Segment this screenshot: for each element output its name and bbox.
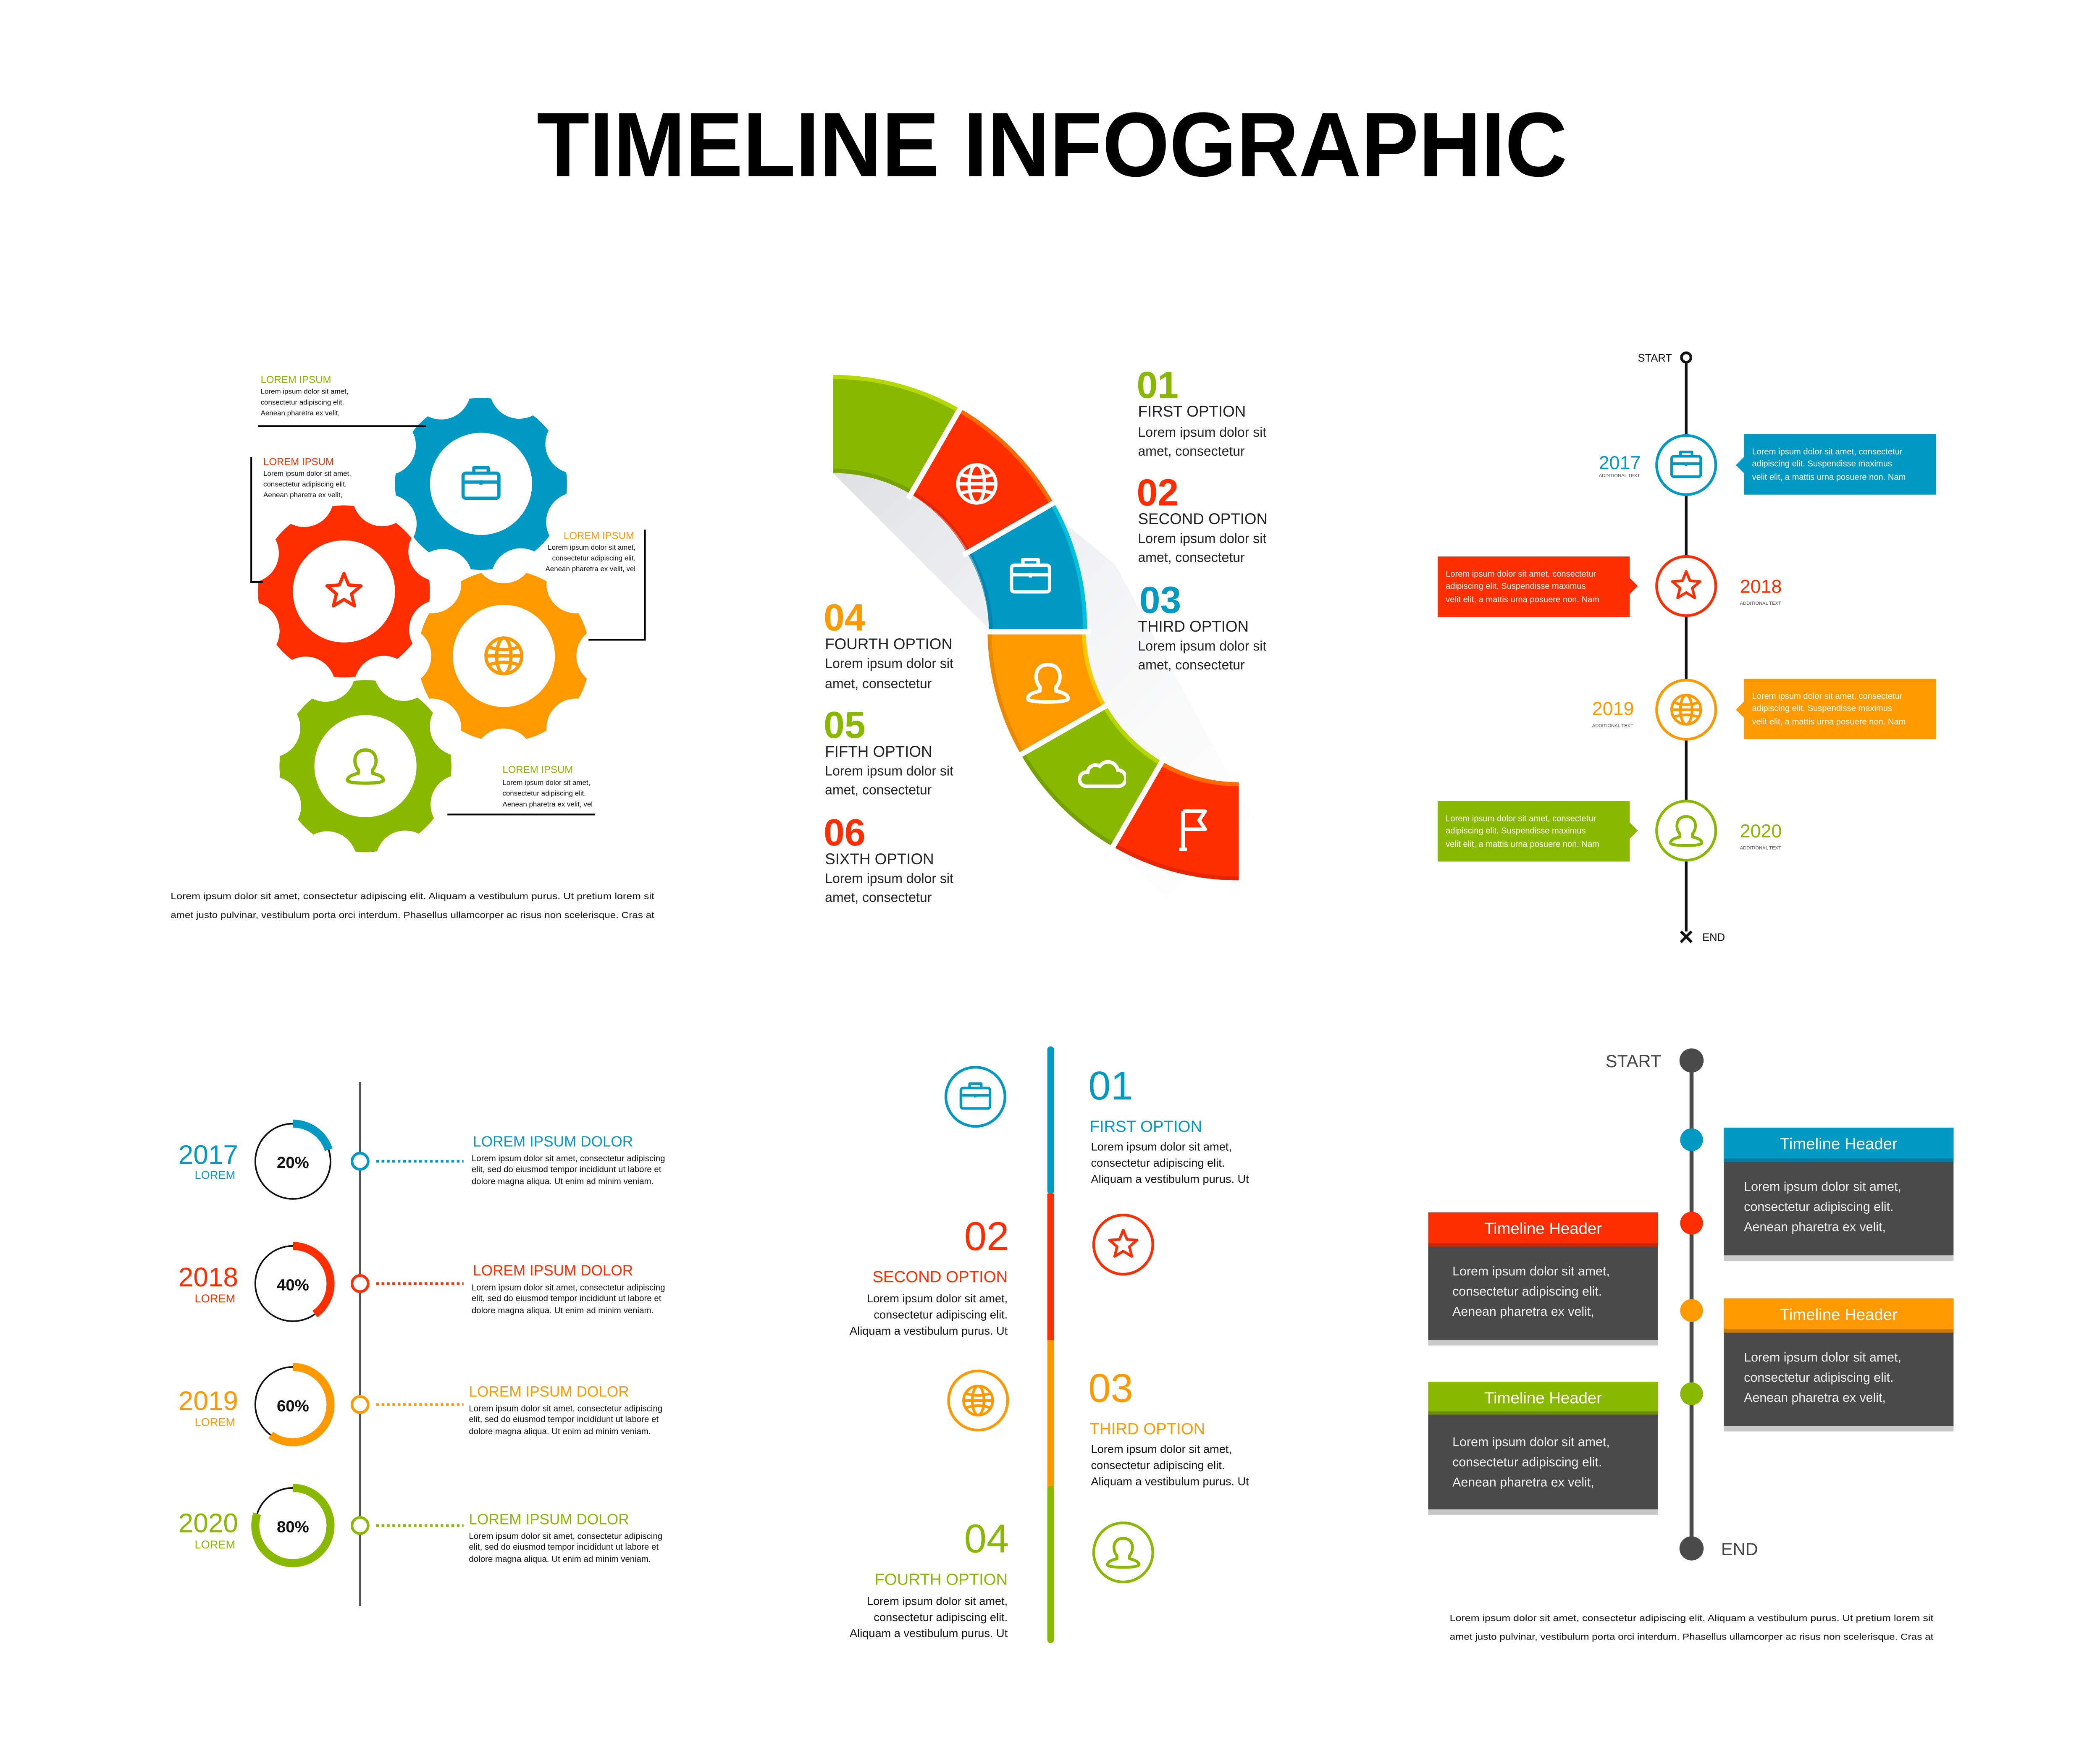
text: red label: Lorem ipsum dolor sit amet, — [263, 470, 351, 478]
panel: progress timeline bottom left — [178, 1082, 665, 1606]
option 04: FOURTH OPTION — [825, 635, 953, 653]
option 02: 02 — [964, 1214, 1009, 1259]
icon: cloud — [1079, 762, 1126, 786]
icon: flag — [1179, 811, 1205, 850]
node 2017: Lorem ipsum dolor sit amet, consectetur — [1752, 447, 1903, 457]
option 02: consectetur adipiscing elit. — [874, 1308, 1008, 1321]
icon: person — [347, 750, 383, 783]
option 03 — [1088, 1366, 1249, 1488]
row 2020: LOREM IPSUM DOLOR — [469, 1511, 629, 1527]
option 03: THIRD OPTION — [1089, 1420, 1205, 1438]
option 05 — [824, 704, 953, 797]
option 04: Aliquam a vestibulum purus. Ut — [850, 1627, 1008, 1640]
option 01: FIRST OPTION — [1089, 1118, 1202, 1136]
option 01 — [1088, 1063, 1249, 1185]
title: TIMELINE INFOGRAPHIC — [537, 94, 1567, 196]
icon: briefcase — [1011, 559, 1050, 592]
option 05: FIFTH OPTION — [825, 743, 932, 760]
option 04 — [824, 596, 953, 691]
node 2019: ADDITIONAL TEXT — [1592, 723, 1633, 728]
row 2018: LOREM — [195, 1292, 235, 1305]
option 04: amet, consectetur — [825, 676, 932, 691]
card: green: consectetur adipiscing elit. — [1452, 1455, 1602, 1469]
option 05: Lorem ipsum dolor sit — [825, 763, 953, 779]
option 01: consectetur adipiscing elit. — [1091, 1156, 1225, 1169]
card: orange: consectetur adipiscing elit. — [1744, 1370, 1893, 1385]
row 2017: elit, sed do eiusmod tempor incididunt ut labore et — [472, 1165, 662, 1174]
option 03: consectetur adipiscing elit. — [1091, 1459, 1225, 1472]
panel: curved options — [824, 364, 1344, 947]
icon circle: globe — [948, 1371, 1008, 1430]
row 2020: Lorem ipsum dolor sit amet, consectetur adipiscing — [469, 1532, 662, 1541]
gear: green — [279, 680, 452, 853]
segment: red 2 — [911, 409, 1053, 551]
card: orange: Lorem ipsum dolor sit amet, — [1744, 1350, 1901, 1364]
text: red label: LOREM IPSUM — [263, 456, 334, 467]
panel: card timeline bottom right — [1428, 1048, 1953, 1642]
option 01: 01 — [1137, 364, 1179, 406]
option 03: THIRD OPTION — [1138, 618, 1249, 635]
option 04: 04 — [824, 596, 866, 638]
text: red label: Aenean pharetra ex velit, — [263, 491, 342, 499]
option 01 — [1137, 364, 1266, 459]
row 2017: LOREM IPSUM DOLOR — [473, 1133, 633, 1150]
row 2018: 2018 — [178, 1262, 238, 1292]
row 2020: 2020 — [178, 1508, 238, 1538]
node 2017: ADDITIONAL TEXT — [1599, 473, 1640, 478]
option 02: SECOND OPTION — [1138, 510, 1268, 527]
text: orange label: Lorem ipsum dolor sit amet, — [548, 543, 635, 551]
node 2018: 2018 — [1740, 576, 1782, 597]
panel: colored line timeline bottom middle — [850, 1050, 1249, 1640]
text: paragraph — [1450, 1614, 1933, 1642]
row 2019: LOREM — [195, 1416, 235, 1429]
node 2020: ADDITIONAL TEXT — [1740, 846, 1781, 851]
card: red — [1428, 1212, 1658, 1346]
row 2018: Lorem ipsum dolor sit amet, consectetur adipiscing — [472, 1283, 665, 1292]
node 2018: Lorem ipsum dolor sit amet, consectetur — [1446, 569, 1596, 579]
row 2019: 2019 — [178, 1385, 238, 1416]
end marker: END — [1702, 931, 1725, 943]
option 01: FIRST OPTION — [1138, 403, 1246, 420]
card: blue: Timeline Header — [1780, 1135, 1898, 1153]
card: red: consectetur adipiscing elit. — [1452, 1284, 1602, 1299]
node 2019: velit elit, a mattis urna posuere non. Nam — [1752, 717, 1906, 727]
option 04: consectetur adipiscing elit. — [874, 1611, 1008, 1624]
icon circle: person — [1094, 1523, 1153, 1582]
option 03: amet, consectetur — [1138, 657, 1245, 672]
text: red label — [263, 456, 351, 499]
icon circle: briefcase — [946, 1067, 1005, 1126]
text: green label bottom: Aenean pharetra ex velit, vel — [502, 800, 593, 808]
row 2019 — [178, 1367, 662, 1442]
row 2020: LOREM — [195, 1538, 235, 1551]
node 2019: 2019 — [1592, 698, 1634, 719]
text: orange label: consectetur adipiscing elit. — [552, 554, 635, 562]
card: blue: Aenean pharetra ex velit, — [1744, 1220, 1886, 1234]
text: paragraph: amet justo pulvinar, vestibulum porta orci interdum. Phasellus ullamcorper ac risus non scelerisque. Cras at — [171, 910, 654, 920]
text: green label bottom — [502, 764, 593, 808]
row 2019: 60% — [277, 1397, 309, 1415]
row 2019: elit, sed do eiusmod tempor incididunt ut labore et — [469, 1414, 659, 1424]
option 03: Lorem ipsum dolor sit — [1138, 638, 1266, 653]
panel: vertical timeline top right — [1438, 352, 1936, 943]
text: green label top: Aenean pharetra ex velit, — [261, 409, 340, 417]
node 2020: 2020 — [1740, 821, 1782, 842]
option 02: 02 — [1137, 471, 1179, 513]
text: red label: consectetur adipiscing elit. — [263, 480, 347, 488]
start: START — [1606, 1051, 1661, 1071]
option 06 — [824, 811, 953, 905]
node 2020: Lorem ipsum dolor sit amet, consectetur — [1446, 814, 1596, 823]
option 02: Lorem ipsum dolor sit amet, — [867, 1292, 1008, 1305]
node 2019 — [1592, 679, 1936, 739]
option 02: Aliquam a vestibulum purus. Ut — [850, 1324, 1008, 1337]
option 06: SIXTH OPTION — [825, 850, 934, 868]
row 2018: dolore magna aliqua. Ut enim ad minim veniam. — [472, 1306, 654, 1315]
card: red: Timeline Header — [1484, 1220, 1602, 1238]
row 2018 — [178, 1246, 665, 1321]
row 2018: elit, sed do eiusmod tempor incididunt ut labore et — [472, 1293, 662, 1303]
node 2019: Lorem ipsum dolor sit amet, consectetur — [1752, 692, 1903, 701]
text: green label top: LOREM IPSUM — [261, 374, 331, 386]
option 06: amet, consectetur — [825, 890, 932, 905]
option 01: Lorem ipsum dolor sit amet, — [1091, 1140, 1232, 1153]
segment: green 1 — [833, 375, 960, 494]
end marker — [1681, 931, 1725, 943]
option 03: 03 — [1088, 1366, 1133, 1411]
option 02: SECOND OPTION — [872, 1268, 1008, 1286]
icon: star — [327, 574, 361, 606]
row 2020: elit, sed do eiusmod tempor incididunt ut labore et — [469, 1542, 659, 1552]
segment: green 5 — [1021, 706, 1162, 847]
icon: globe — [958, 465, 996, 503]
option 06: Lorem ipsum dolor sit — [825, 871, 953, 886]
row 2020: dolore magna aliqua. Ut enim ad minim veniam. — [469, 1554, 651, 1564]
end — [1680, 1536, 1758, 1561]
node 2019: adipiscing elit. Suspendisse maximus — [1752, 704, 1892, 713]
card: blue: consectetur adipiscing elit. — [1744, 1200, 1893, 1214]
option 04: 04 — [964, 1516, 1009, 1561]
option 05: 05 — [824, 704, 866, 746]
text: orange label: Aenean pharetra ex velit, vel — [545, 565, 635, 573]
node 2020 — [1438, 801, 1782, 861]
start — [1606, 1048, 1704, 1073]
text: green label bottom: consectetur adipiscing elit. — [502, 790, 586, 798]
card: blue: Lorem ipsum dolor sit amet, — [1744, 1180, 1901, 1194]
text: paragraph: Lorem ipsum dolor sit amet, consectetur adipiscing elit. Aliquam a vestibulum purus. Ut pretium lorem sit — [1450, 1614, 1933, 1623]
text: paragraph: amet justo pulvinar, vestibulum porta orci interdum. Phasellus ullamcorper ac risus non scelerisque. Cras at — [1450, 1632, 1933, 1642]
card: green: Timeline Header — [1484, 1389, 1602, 1407]
node 2017: 2017 — [1599, 452, 1641, 473]
text: green label top: consectetur adipiscing elit. — [261, 398, 344, 406]
option 04 — [850, 1516, 1009, 1640]
card: orange — [1724, 1299, 1953, 1431]
option 02: Lorem ipsum dolor sit — [1138, 531, 1266, 546]
card: blue — [1724, 1128, 1953, 1261]
option 04: Lorem ipsum dolor sit amet, — [867, 1594, 1008, 1607]
icon: globe — [486, 638, 522, 674]
node 2018: velit elit, a mattis urna posuere non. Nam — [1446, 595, 1599, 604]
segment: blue 3 — [968, 502, 1087, 629]
row 2020: 80% — [277, 1518, 309, 1536]
row 2017: 20% — [277, 1154, 309, 1172]
start marker: START — [1638, 352, 1672, 364]
gear: red — [258, 505, 430, 677]
option 01: amet, consectetur — [1138, 443, 1245, 459]
end: END — [1721, 1539, 1758, 1559]
option 04: FOURTH OPTION — [874, 1570, 1008, 1588]
node 2017: velit elit, a mattis urna posuere non. Nam — [1752, 473, 1906, 482]
icon circle: star — [1094, 1215, 1153, 1274]
option 01: Lorem ipsum dolor sit — [1138, 425, 1266, 440]
option 06: 06 — [824, 811, 866, 853]
card: green: Lorem ipsum dolor sit amet, — [1452, 1435, 1610, 1449]
node 2020: velit elit, a mattis urna posuere non. Nam — [1446, 840, 1599, 849]
gear: blue — [395, 398, 567, 570]
row 2017 — [178, 1124, 665, 1199]
text: orange label — [545, 530, 635, 573]
icon: person — [1028, 665, 1068, 702]
node 2017 — [1599, 434, 1936, 495]
text: green label bottom: Lorem ipsum dolor sit amet, — [502, 779, 590, 787]
shadow — [833, 443, 1344, 947]
card: green: Aenean pharetra ex velit, — [1452, 1475, 1594, 1490]
row 2020 — [178, 1488, 662, 1564]
row 2017: Lorem ipsum dolor sit amet, consectetur adipiscing — [472, 1154, 665, 1163]
icon: briefcase — [463, 468, 499, 498]
option 02 — [1137, 471, 1268, 565]
row 2017: LOREM — [195, 1168, 235, 1181]
text: green label top — [261, 374, 349, 417]
node 2018: ADDITIONAL TEXT — [1740, 601, 1781, 606]
option 01: 01 — [1088, 1063, 1133, 1108]
card: green — [1428, 1382, 1658, 1515]
card: red: Lorem ipsum dolor sit amet, — [1452, 1264, 1610, 1278]
node 2018: adipiscing elit. Suspendisse maximus — [1446, 582, 1586, 591]
card: orange: Timeline Header — [1780, 1306, 1898, 1324]
row 2018: LOREM IPSUM DOLOR — [473, 1262, 633, 1279]
text: paragraph — [171, 892, 654, 920]
row 2019: dolore magna aliqua. Ut enim ad minim veniam. — [469, 1427, 651, 1436]
option 03: Aliquam a vestibulum purus. Ut — [1091, 1475, 1249, 1488]
text: green label top: Lorem ipsum dolor sit amet, — [261, 388, 349, 396]
option 04: Lorem ipsum dolor sit — [825, 656, 953, 671]
text: orange label: LOREM IPSUM — [564, 530, 634, 541]
text: green label bottom: LOREM IPSUM — [502, 764, 573, 775]
segment: orange 4 — [987, 629, 1106, 755]
row 2017: dolore magna aliqua. Ut enim ad minim veniam. — [472, 1177, 654, 1186]
option 03: Lorem ipsum dolor sit amet, — [1091, 1443, 1232, 1456]
option 01: Aliquam a vestibulum purus. Ut — [1091, 1172, 1249, 1185]
row 2019: Lorem ipsum dolor sit amet, consectetur adipiscing — [469, 1404, 662, 1413]
option 02 — [850, 1214, 1009, 1337]
node 2018 — [1438, 556, 1782, 617]
row 2019: LOREM IPSUM DOLOR — [469, 1383, 629, 1400]
node 2020: adipiscing elit. Suspendisse maximus — [1446, 826, 1586, 835]
panel: gears — [171, 368, 654, 920]
option 02: amet, consectetur — [1138, 550, 1245, 565]
option 03: 03 — [1139, 579, 1181, 621]
card: orange: Aenean pharetra ex velit, — [1744, 1391, 1886, 1405]
node 2017: adipiscing elit. Suspendisse maximus — [1752, 459, 1892, 469]
text: paragraph: Lorem ipsum dolor sit amet, consectetur adipiscing elit. Aliquam a vestibulum purus. Ut pretium lorem sit — [171, 892, 654, 901]
start marker — [1638, 352, 1691, 364]
option 05: amet, consectetur — [825, 782, 932, 797]
row 2017: 2017 — [178, 1140, 238, 1170]
option 03 — [1138, 579, 1266, 672]
gear: orange — [421, 573, 587, 739]
card: red: Aenean pharetra ex velit, — [1452, 1304, 1594, 1319]
row 2018: 40% — [277, 1276, 309, 1294]
segment: red 6 — [1113, 762, 1239, 880]
